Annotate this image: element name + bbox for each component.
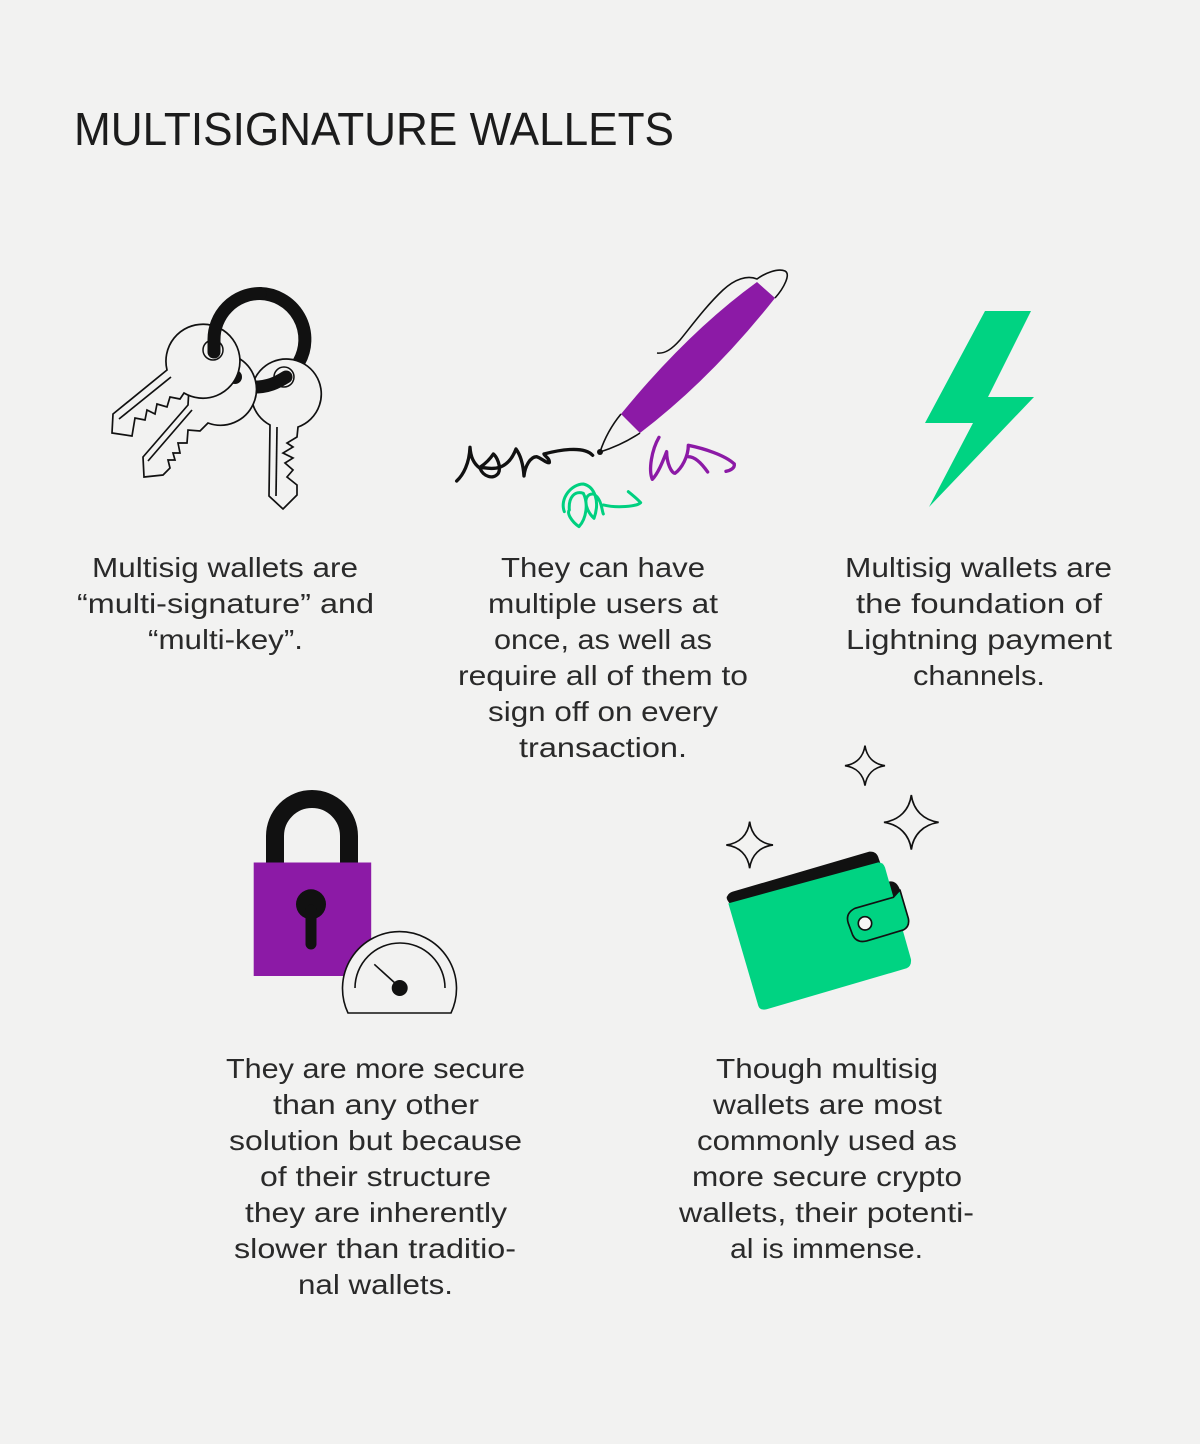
text: multiple users [458,552,748,763]
text: lightning channels: Multisig wallets are [845,552,1112,583]
sparkles [726,746,939,868]
wallet top band [727,852,881,905]
text: potential: al is immense. [730,1233,923,1264]
wallet body [728,862,911,1010]
text: multiple users: They can have [501,552,705,583]
lock body [254,862,371,976]
keyhole [296,889,326,919]
text: security trade-off [226,1053,525,1300]
wallet snap [858,917,872,930]
text: multi-signature and multi-key [77,552,374,655]
text: lightning channels: the foundation of [856,588,1102,619]
text: potential: wallets, their potenti- [678,1197,974,1228]
text: lightning channels: Lightning payment [846,624,1112,655]
text: potential: wallets are most [712,1089,942,1120]
purple signature [651,437,734,479]
text: multi-signature and multi-key: “multi-key”. [148,624,303,655]
title: MULTISIGNATURE WALLETS [74,103,674,155]
text: potential: more secure crypto [692,1161,962,1192]
text: security trade-off: of their structure [260,1161,491,1192]
text: potential: commonly used as [697,1125,957,1156]
black signature [457,447,593,481]
lock shackle [275,799,349,863]
text: security trade-off: solution but because [229,1125,522,1156]
text: multiple users: transaction. [519,732,687,763]
icon: pen with signatures [457,270,787,527]
speedometer [342,932,456,1013]
text: lightning channels: channels. [913,660,1045,691]
text: multiple users: sign off on every [488,696,718,727]
text: security trade-off: than any other [273,1089,479,1120]
icon: lightning bolt [925,311,1034,507]
wallet clasp back [888,881,902,900]
text: security trade-off: nal wallets. [298,1269,453,1300]
text: multiple users: once, as well as [494,624,712,655]
text: multi-signature and multi-key: “multi-signature” and [77,588,374,619]
icon: wallet with sparkles [726,746,939,1010]
text: potential: Though multisig [716,1053,938,1084]
pen barrel [621,282,775,433]
text: multi-signature and multi-key: Multisig wallets are [92,552,358,583]
pen outline [600,270,787,452]
wallet clasp [847,890,909,941]
text: potential [678,1053,974,1264]
icon: keys on a ring [112,294,321,509]
green signature [563,484,641,527]
text: multiple users: require all of them to [458,660,748,691]
text: security trade-off: they are inherently [245,1197,507,1228]
text: multiple users: multiple users at [488,588,718,619]
icon: padlock with speedometer [254,799,456,1013]
text: security trade-off: They are more secure [226,1053,525,1084]
text: lightning channels [845,552,1112,691]
text: security trade-off: slower than traditio- [234,1233,516,1264]
